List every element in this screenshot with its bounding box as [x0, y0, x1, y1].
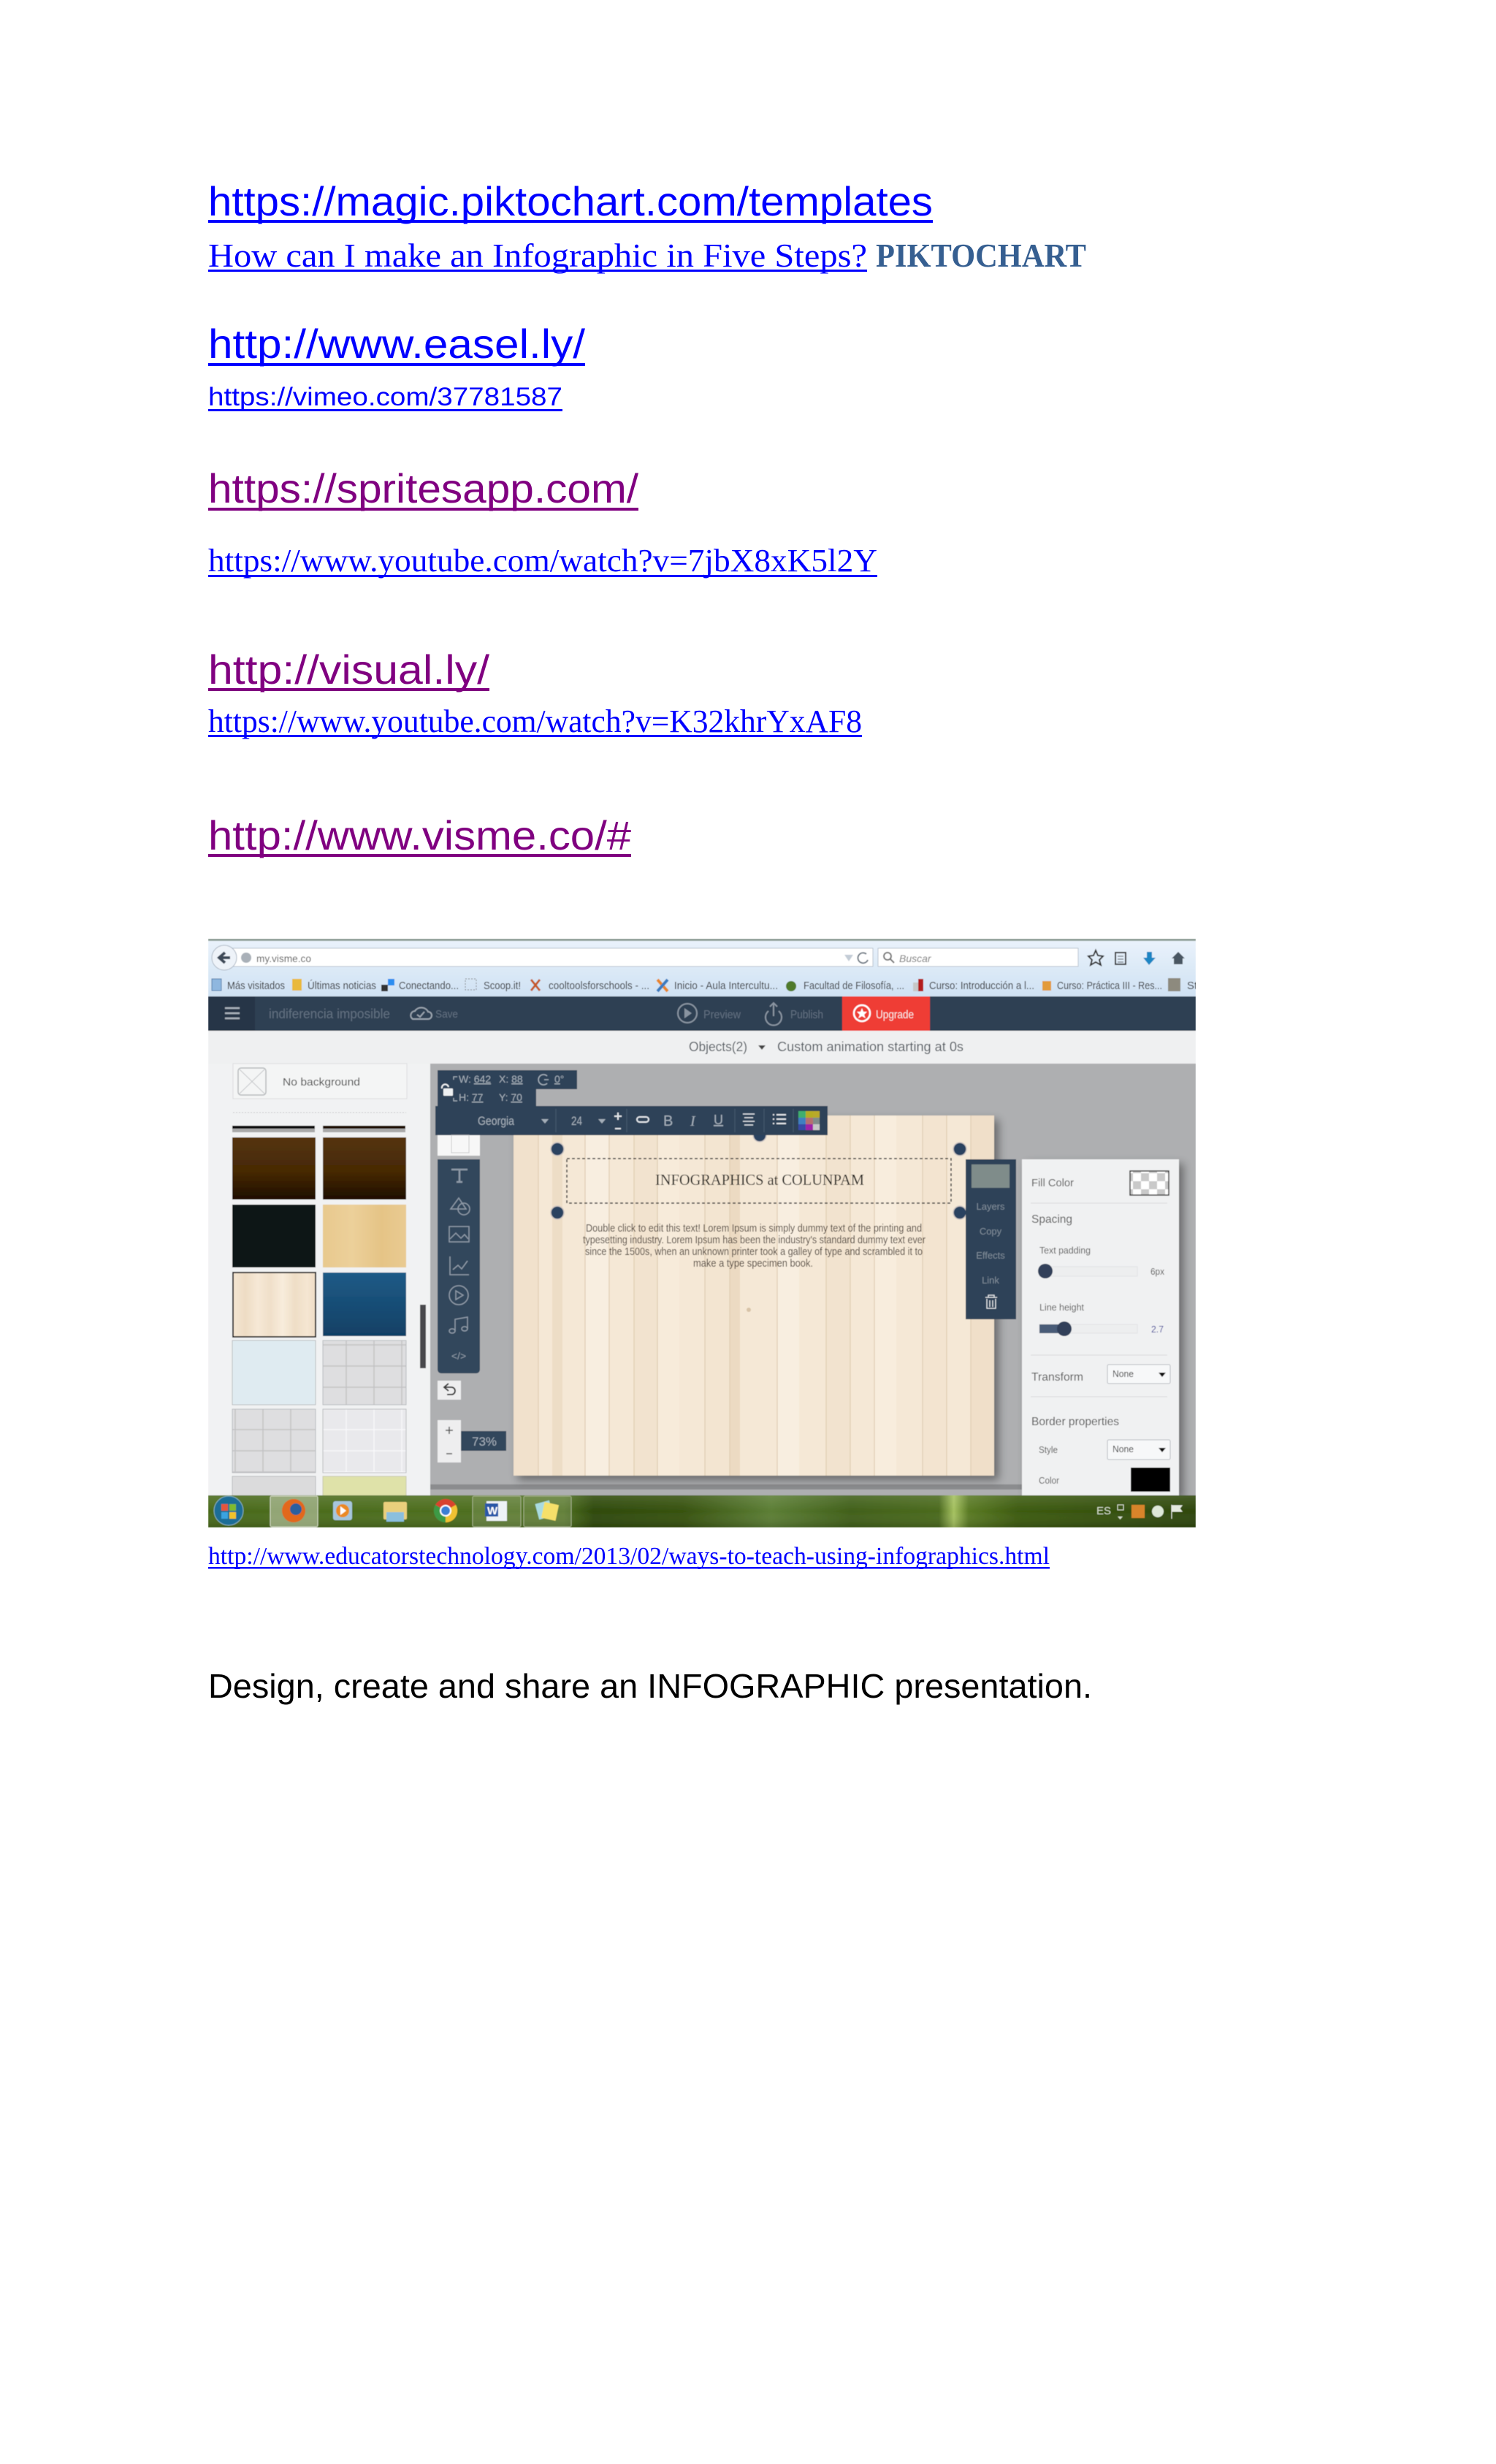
lorem ipsum paragraph: since the 1500s, when an unknown printer took a galley of type and scrambled it to	[585, 1246, 923, 1258]
right action panel: Layers	[976, 1201, 1005, 1212]
left tools column	[438, 1135, 480, 1373]
size and position box: Y: 70	[499, 1091, 522, 1103]
properties panel	[1022, 1159, 1183, 1500]
zoom control	[438, 1420, 506, 1462]
link: spritesapp: https://spritesapp.com/	[208, 465, 638, 511]
size and position box	[438, 1070, 577, 1106]
text formatting toolbar: 24	[571, 1114, 582, 1128]
properties panel: Text padding	[1039, 1245, 1091, 1256]
bookmarks bar: Curso: Introducción a l...	[929, 980, 1034, 992]
firefox icon	[282, 1499, 305, 1522]
link: vimeo: https://vimeo.com/37781587	[208, 383, 562, 411]
link: easel.ly: http://www.easel.ly/	[208, 321, 585, 367]
app header bar: Upgrade	[876, 1009, 914, 1021]
word icon	[485, 1501, 507, 1521]
sub bar: Custom animation starting at 0s	[777, 1040, 963, 1054]
start orb	[214, 1496, 243, 1525]
bookmarks bar: Inicio - Aula Intercultu...	[674, 980, 778, 992]
size and position box: X: 88	[499, 1073, 523, 1085]
text formatting toolbar: U	[714, 1113, 723, 1127]
link: visual.ly: http://visual.ly/	[208, 646, 489, 693]
properties panel: 2.7	[1151, 1324, 1164, 1335]
text formatting toolbar: I	[690, 1113, 696, 1129]
properties panel: Line height	[1039, 1302, 1084, 1313]
left tools column: </>	[451, 1350, 466, 1362]
link: educatorstechnology: http://www.educatorstechnology.com/2013/02/ways-to-teach-using-infographics.html	[208, 1543, 1050, 1570]
size and position box: 0°	[554, 1073, 564, 1085]
selected title box	[567, 1159, 951, 1203]
app header bar	[208, 996, 1196, 1031]
sticky notes icon	[535, 1500, 559, 1521]
heading: PIKTOCHART: PIKTOCHART	[876, 237, 1086, 274]
bookmarks bar	[212, 978, 1198, 992]
chrome icon	[434, 1499, 457, 1522]
canvas: wood board	[514, 1115, 999, 1480]
size and position box: W: 642	[459, 1073, 491, 1085]
link: youtube 7jbX8xK5l2Y: https://www.youtube.com/watch?v=7jbX8xK5l2Y	[208, 543, 877, 579]
bookmarks bar: Curso: Práctica III - Res...	[1057, 980, 1162, 992]
text formatting toolbar	[435, 1106, 828, 1135]
darker strip below canvas	[430, 1484, 1022, 1490]
system tray	[1096, 1505, 1182, 1519]
bookmarks bar: Facultad de Filosofía, ...	[804, 980, 904, 992]
selected title box: INFOGRAPHICS at COLUNPAM	[655, 1171, 864, 1189]
lorem ipsum paragraph: typesetting industry. Lorem Ipsum has been the industry's standard dummy text ever	[583, 1235, 926, 1246]
undo button	[438, 1381, 461, 1400]
background picker panel	[208, 1064, 430, 1497]
sub bar	[208, 1031, 1196, 1064]
app header bar: Save	[435, 1008, 458, 1021]
bookmarks bar: cooltoolsforschools - ...	[549, 980, 649, 992]
text formatting toolbar: Georgia	[478, 1114, 514, 1128]
properties panel: Color	[1039, 1475, 1060, 1486]
browser toolbar: Buscar	[899, 953, 932, 964]
bookmarks bar: St	[1187, 980, 1198, 992]
bookmarks bar: Scoop.it!	[484, 980, 521, 992]
properties panel: None	[1113, 1368, 1134, 1379]
bookmarks bar: Más visitados	[227, 980, 285, 992]
lorem ipsum paragraph: Double click to edit this text! Lorem Ipsum is simply dummy text of the printing and	[586, 1223, 922, 1235]
properties panel: None	[1113, 1443, 1134, 1454]
text: design, create and share: Design, create and share an INFOGRAPHIC presentation.	[208, 1667, 1092, 1705]
right action panel	[966, 1159, 1016, 1319]
right action panel: Copy	[980, 1226, 1002, 1237]
zoom control: 73%	[472, 1435, 497, 1449]
background picker panel: No background	[283, 1076, 360, 1088]
lorem ipsum paragraph: make a type specimen book.	[693, 1258, 813, 1270]
link: piktochart templates: https://magic.piktochart.com/templates	[208, 178, 933, 224]
word icon: W	[487, 1505, 498, 1517]
app header bar: Preview	[703, 1009, 741, 1021]
text formatting toolbar: B	[663, 1113, 673, 1129]
link: youtube K32khrYxAF8: https://www.youtube.com/watch?v=K32khrYxAF8	[208, 703, 862, 739]
folder icon	[383, 1502, 407, 1522]
system tray: ES	[1096, 1505, 1111, 1517]
properties panel: Transform	[1031, 1371, 1083, 1384]
app header bar: indiferencia imposible	[269, 1007, 390, 1021]
lorem ipsum paragraph	[583, 1223, 926, 1270]
size and position box: H: 77	[459, 1091, 484, 1103]
properties panel: Style	[1039, 1444, 1058, 1455]
properties panel: Spacing	[1031, 1213, 1072, 1226]
windows taskbar	[208, 1495, 1196, 1527]
properties panel: 6px	[1150, 1266, 1164, 1277]
bookmarks bar: Conectando...	[399, 980, 459, 992]
app header bar: Publish	[790, 1009, 823, 1021]
media player icon	[333, 1501, 352, 1520]
bookmarks bar: Últimas noticias	[308, 980, 376, 992]
right action panel: Link	[982, 1275, 999, 1286]
screenshot: visme editor in browser	[208, 939, 1198, 1527]
link: how can I make an infographic: How can I make an Infographic in Five Steps?	[208, 237, 867, 274]
right action panel: Effects	[976, 1250, 1005, 1261]
properties panel: Border properties	[1031, 1416, 1119, 1428]
selection handles	[551, 1129, 966, 1219]
properties panel: Fill Color	[1031, 1177, 1074, 1189]
browser toolbar	[208, 939, 1196, 996]
link: visme: http://www.visme.co/#	[208, 812, 631, 858]
sub bar: Objects(2)	[689, 1040, 747, 1054]
browser toolbar: my.visme.co	[256, 953, 311, 964]
